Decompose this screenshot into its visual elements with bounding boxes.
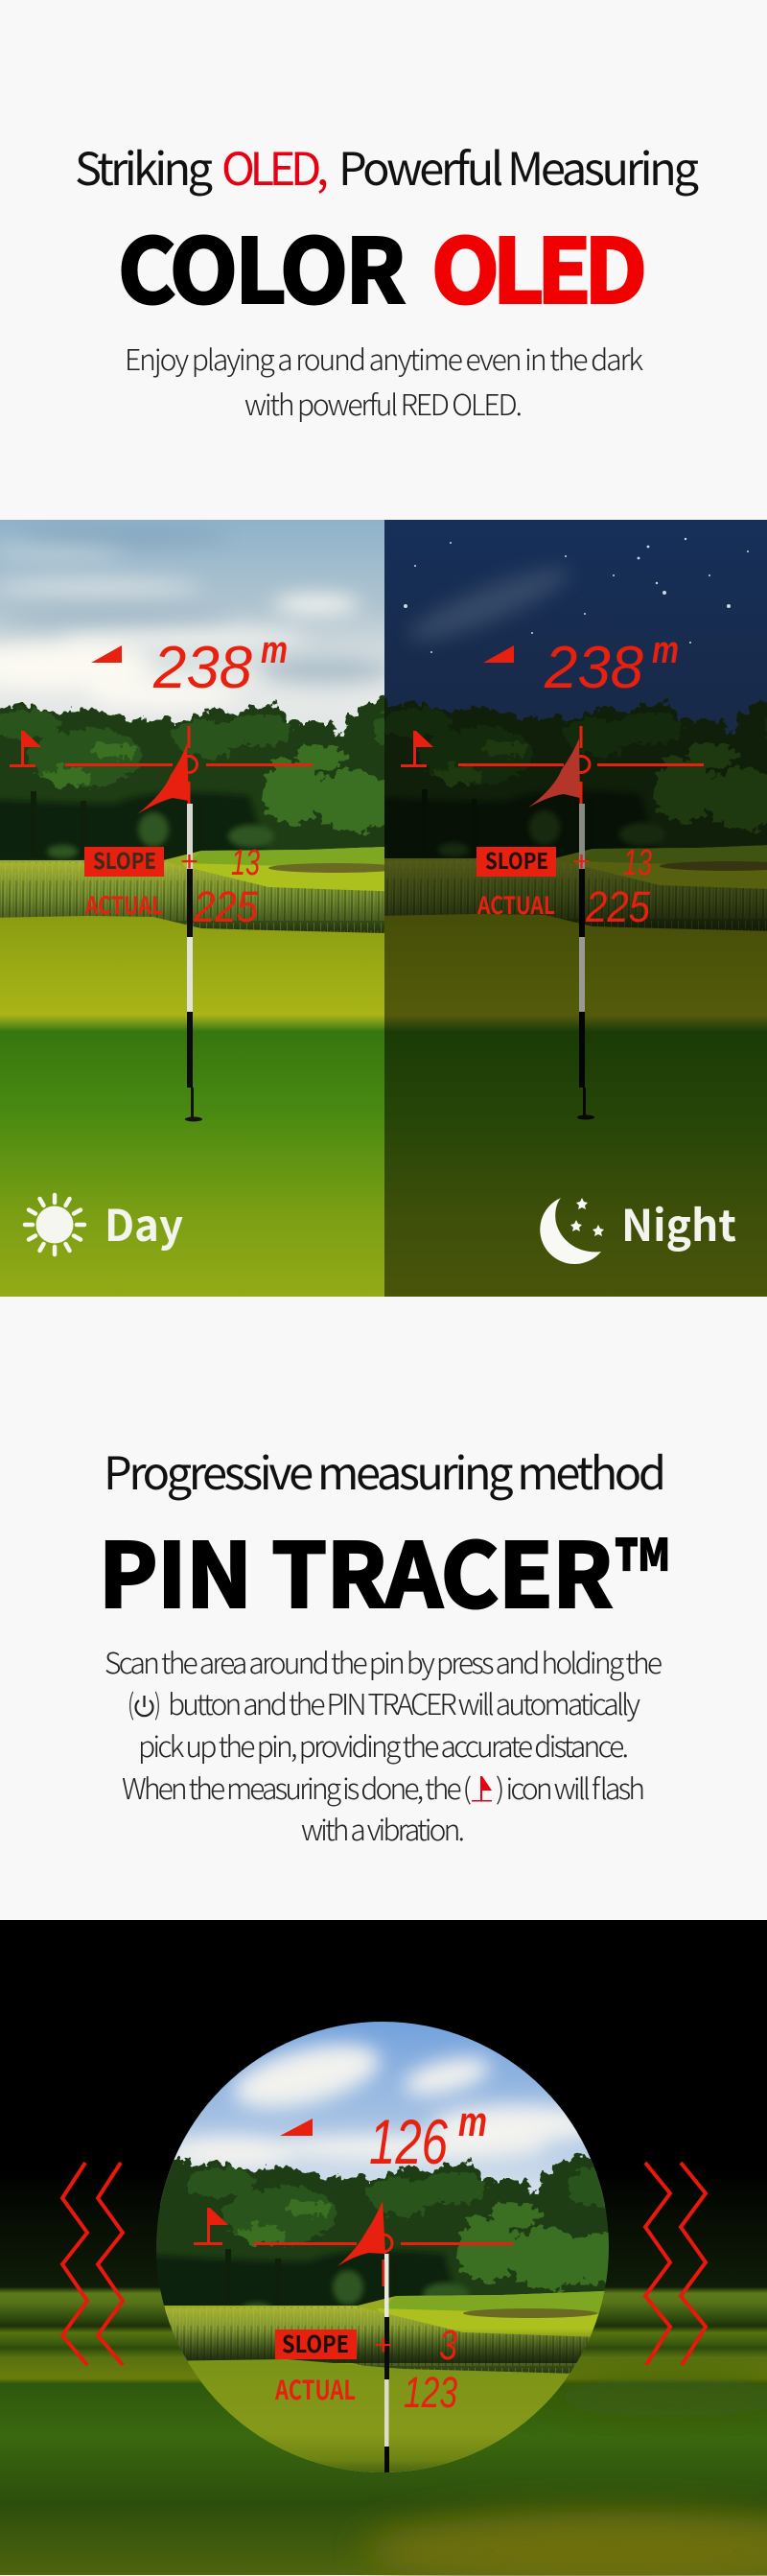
scope slope badge: SLOPE [282,2326,349,2359]
section: color oled heading [75,132,699,424]
scope distance reading: 126 [369,2106,448,2177]
panel: day view [0,520,384,1297]
day slope value: 13 [231,843,260,883]
night slope value [572,843,652,883]
day sky [0,520,384,737]
day actual value: 225 [193,882,259,931]
panel: night view [384,520,767,1297]
description: pin tracer: button and the PIN TRACER will automatically [168,1681,640,1723]
day actual label: ACTUAL [84,887,163,922]
day reticle [65,726,313,804]
description: pin tracer: ) icon will flash [496,1766,645,1808]
day trees [0,694,384,860]
title: color oled: COLOR [118,201,406,328]
scope foreground grass [188,2359,569,2472]
scope actual value: 123 [404,2368,457,2417]
description: pin tracer: When the measuring is done, the ( [122,1766,472,1808]
day flag icon [10,731,41,767]
day fairway and rough [0,847,384,1031]
label: night: Night [621,1191,736,1253]
night slope value: 13 [623,843,652,883]
day slope icon [91,645,122,663]
scope reed shadow [173,2330,593,2363]
arrows: left vibration zigzags [62,2163,123,2365]
panel: scope view with blurred surroundings [0,1920,767,2576]
subtitle: striking oled powerful measuring: Powerful Measuring [338,132,699,199]
day slope value: + [180,846,198,878]
icon: moon and stars [540,1198,604,1264]
night actual value: 225 [585,882,651,931]
scope metre unit: m [458,2098,487,2145]
description: pin tracer: pick up the pin, providing the accurate distance. [138,1723,629,1766]
description: pin tracer: with a vibration. [301,1807,465,1849]
scope sky [153,2014,614,2206]
title: pin tracer: ™ [616,1502,669,1635]
scope slope value: + [374,2330,393,2361]
night distance reading: 238 [544,635,644,701]
description: pin tracer: Scan the area around the pin by press and holding the [105,1640,662,1682]
night sky [384,520,767,736]
day metre unit: m [261,629,288,671]
subtitle: striking oled powerful measuring: Striking [75,132,213,199]
scope slope value: 3 [439,2322,457,2369]
subtitle: striking oled powerful measuring: OLED, [221,132,329,199]
scope slope value [374,2322,457,2369]
night flag pin [528,738,594,1120]
hud: night [401,629,704,1120]
day foreground grass [0,1015,384,1297]
scope reticle [254,2235,513,2286]
label: day: Day [105,1191,183,1253]
night landscape [384,697,767,1297]
description: color oled: with powerful RED OLED. [244,382,523,424]
night flag icon [401,731,433,767]
hud: scope [194,2098,513,2472]
section: pin tracer heading [99,1437,669,1849]
description: pin tracer: ) [154,1681,161,1723]
hud: day [10,629,313,1122]
night slope icon [483,645,514,663]
scope flag icon [194,2208,228,2245]
night actual label: ACTUAL [476,887,555,922]
day slope value [180,843,260,883]
night slope value: + [572,846,591,878]
day distance reading: 238 [152,635,253,701]
blurred course background [0,1920,767,2576]
day slope badge: SLOPE [93,843,156,876]
day flag pin [137,743,202,1122]
description: color oled [125,337,643,424]
arrows: right vibration zigzags [645,2163,706,2365]
description: pin tracer [105,1640,662,1849]
scope fairway and rough [164,2290,604,2472]
subtitle: progressive measuring method: Progressive measuring method [104,1437,666,1503]
scope trees [156,2152,609,2316]
description: pin tracer: ( [128,1681,134,1723]
night metre unit: m [652,629,679,671]
scope flag pin [337,2201,389,2472]
title: color oled [118,201,647,328]
title: color oled: OLED [431,201,647,328]
subtitle: striking oled powerful measuring [75,132,699,199]
icon: sun [25,1195,84,1254]
scope circle view [156,2022,609,2472]
scope slope icon [280,2119,313,2136]
description: color oled: Enjoy playing a round anytime even in the dark [125,337,643,379]
icon: power button [135,1696,152,1716]
icon: red pin flag [472,1776,492,1801]
title: pin tracer: PIN TRACER [99,1506,613,1632]
night slope badge: SLOPE [485,843,548,876]
night reticle [458,726,704,804]
scope actual label: ACTUAL [274,2370,356,2408]
